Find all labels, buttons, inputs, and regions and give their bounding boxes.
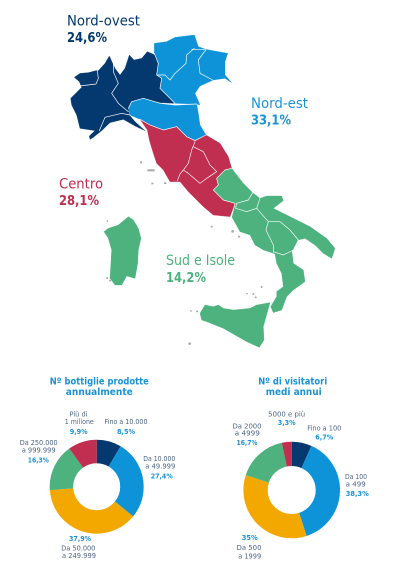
labels: bottiglie: 37,9% [69,534,91,543]
labels: visitatori: a 1999 [238,552,261,560]
small islands [106,161,263,345]
labels: bottiglie: Fino a 10.000 [104,418,148,426]
labels: bottiglie: a 249.999 [62,552,96,560]
labels: visitatori [232,411,369,560]
label: Centro: Centro [59,176,103,192]
heading: visitatori: medi annui [266,387,322,398]
panel: bottiglie prodotte [20,377,175,560]
label: Nord-ovest: Nord-ovest [67,14,140,30]
labels: bottiglie [20,411,175,560]
labels: bottiglie: a 49.999 [145,462,175,470]
heading: visitatori [258,377,327,398]
label: Sud e Isole: 14,2% [166,270,206,286]
label: Centro: 28,1% [59,193,99,209]
labels: visitatori: 16,7% [236,438,258,447]
label: Nord-ovest [67,14,140,46]
region group: Nord-ovest [71,52,175,139]
labels: visitatori: Da 2000 [232,422,262,430]
label: Nord-est: Nord-est [251,96,308,112]
heading: bottiglie: Nº bottiglie prodotte [50,377,149,388]
labels: bottiglie: 8,5% [117,427,135,436]
heading: bottiglie [50,377,149,398]
labels: visitatori: 3,3% [278,418,296,427]
labels: visitatori: 35% [242,533,258,542]
label: Centro [59,176,103,209]
island: Sardegna [104,217,141,285]
region group: Sud e Isole [104,168,335,347]
label: Nord-est [251,96,308,128]
label: Nord-est: 33,1% [251,112,291,128]
heading: visitatori: Nº di visitatori [258,377,327,388]
panel: visitatori [232,377,369,560]
labels: visitatori: 5000 e più [268,411,305,419]
labels: visitatori: Da 500 [236,544,262,552]
labels: visitatori: Fino a 100 [307,425,341,433]
labels: bottiglie: 27,4% [151,471,173,480]
labels: visitatori: 6,7% [315,432,333,441]
labels: visitatori: 38,3% [346,489,369,498]
labels: bottiglie: 1 milione [65,418,94,426]
region group: Nord-est [128,35,232,140]
region group: Centro [140,119,235,217]
labels: bottiglie: Da 250.000 [20,439,58,447]
donut chart: visitatori [256,454,328,526]
labels: visitatori: a 499 [346,481,366,489]
labels: visitatori: a 4999 [235,430,260,438]
labels: bottiglie: 16,3% [28,456,49,465]
heading: bottiglie: annualmente [66,387,133,398]
labels: bottiglie: 9,9% [70,427,88,436]
labels: bottiglie: Da 50.000 [61,545,95,553]
labels: visitatori: Da 100 [345,473,367,481]
labels: bottiglie: Più di [70,411,88,419]
label: Nord-ovest: 24,6% [67,30,107,46]
label: Sud e Isole [166,253,235,286]
label: Sud e Isole: Sud e Isole [166,253,235,269]
map of Italy [71,35,335,347]
region borders [79,48,298,255]
labels: bottiglie: a 999.999 [22,447,56,455]
donut chart: bottiglie [61,451,132,522]
island: Sicilia [200,303,270,347]
labels: bottiglie: Da 10.000 [143,455,175,463]
